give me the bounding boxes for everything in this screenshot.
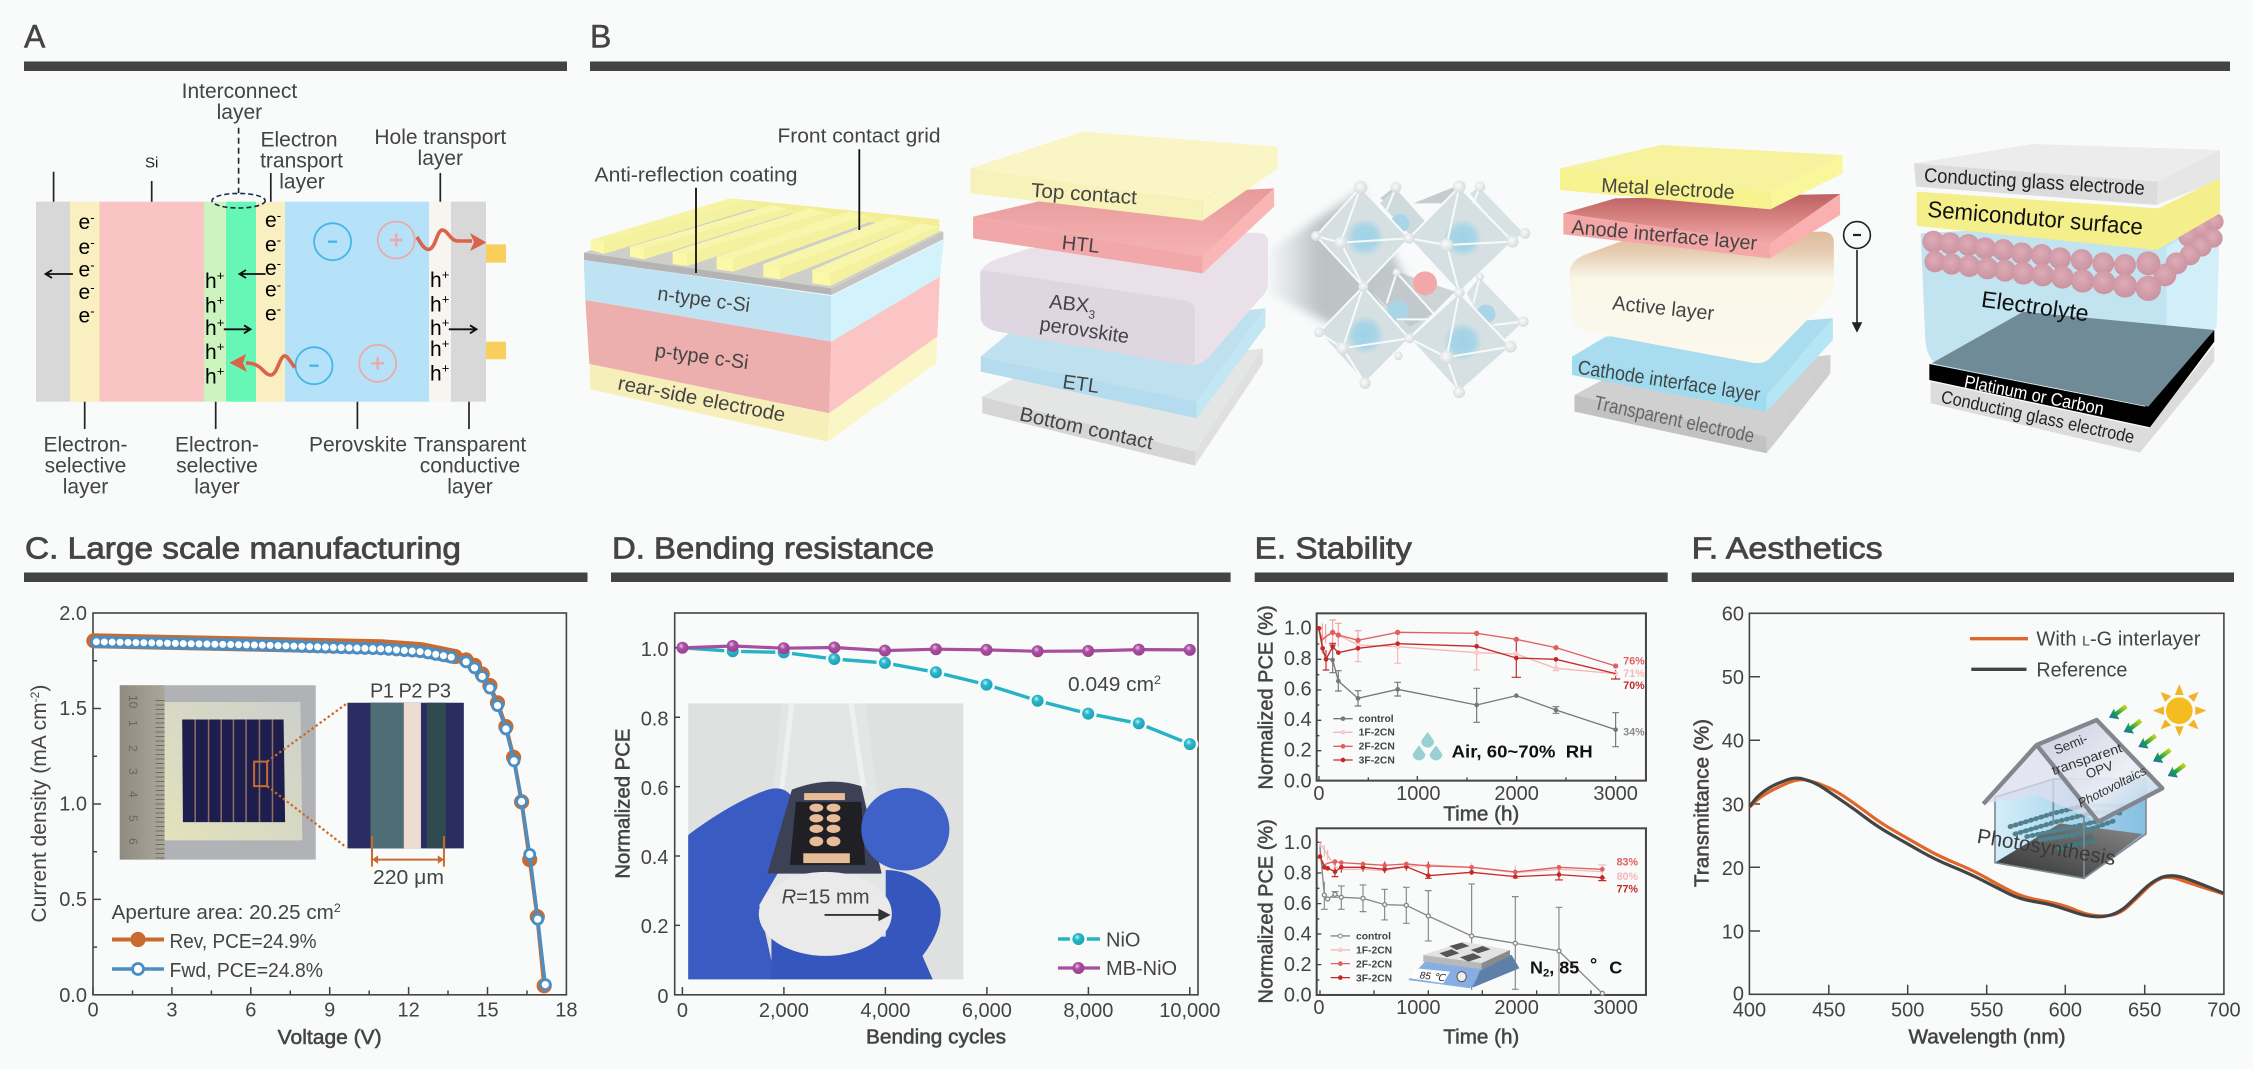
tick labels D: 4,000 (860, 1000, 910, 1022)
labels A: Electron- (43, 434, 128, 457)
tick labels F: 500 (1891, 1000, 1924, 1022)
lower stability chart: 0.8 (1284, 862, 1312, 884)
lower stability chart (1255, 819, 1646, 1048)
legend D: NiO (1106, 930, 1140, 952)
tick labels C: 0.5 (59, 889, 87, 911)
tick labels C: 15 (476, 1000, 499, 1022)
black arrows (46, 270, 476, 333)
labels: silicon and perovskite stacks: Anti-reflection coating (594, 165, 798, 187)
legend F: Reference (2036, 659, 2127, 681)
labels A: layer (63, 476, 108, 498)
MB-NiO series (676, 640, 1196, 657)
module photo: 10 (126, 695, 140, 709)
tick labels C: 0 (87, 1000, 99, 1022)
charge carriers: + (217, 268, 224, 283)
charge carriers: - (277, 208, 281, 223)
area annotation: 2 (1154, 673, 1161, 687)
labels A: Interconnect (182, 80, 297, 103)
interconnect callout (212, 128, 265, 208)
heading D: D. Bending resistance (612, 530, 934, 566)
leader lines (54, 172, 469, 429)
tick labels F: 400 (1733, 1000, 1766, 1022)
greenhouse labels: Photosynthesis (1975, 825, 2117, 870)
labels: silicon and perovskite stacks: ABX (1048, 291, 1090, 317)
lower stability chart: 3000 (1593, 997, 1638, 1019)
lower stability chart: 80% (1617, 871, 1638, 883)
charge carriers: + (442, 336, 449, 351)
lower stability chart: 85 ℃ (1419, 970, 1447, 985)
labels A: transport (260, 150, 343, 173)
lower stability chart: C (1609, 957, 1622, 977)
module photo (120, 685, 346, 860)
lower stability chart: 1F-2CN (1356, 946, 1392, 957)
y axis title D: Normalized PCE (611, 729, 634, 879)
charge carriers: e (265, 303, 277, 326)
charge carriers: h (430, 363, 442, 386)
crystal structure (1270, 180, 1530, 398)
upper stability chart: 2000 (1494, 783, 1539, 805)
labels: silicon and perovskite stacks: n-type c-Si (656, 283, 751, 317)
labels A: layer (279, 170, 325, 194)
labels A (43, 80, 526, 498)
heading bar A (24, 62, 567, 71)
lower stability chart: Normalized PCE (%) (1255, 819, 1277, 1003)
labels A: layer (418, 147, 463, 170)
labels A: Electron (260, 129, 338, 152)
charge carriers: + (217, 363, 224, 378)
upper stability chart: 76% (1623, 656, 1645, 668)
charge carriers: e (78, 305, 90, 328)
heading bar F (1692, 572, 2234, 582)
y axis title C: ) (28, 685, 51, 692)
panel E: stability (1255, 530, 1668, 1048)
labels: silicon and perovskite stacks: Front contact grid (778, 126, 940, 148)
labels: dye-sensitised stack: Conducting glass electrode (1939, 387, 2136, 447)
upper stability chart: 0.2 (1284, 740, 1312, 762)
x axis title F: Wavelength (nm) (1908, 1025, 2066, 1048)
labels: dye-sensitised stack: Semicondutor surface (1927, 196, 2144, 240)
upper stability chart: 1000 (1396, 783, 1441, 805)
tick labels C (59, 603, 578, 1022)
legend C: Rev, PCE=24.9% (170, 931, 317, 953)
charge carriers: + (217, 339, 224, 354)
upper stability chart: 34% (1623, 726, 1645, 738)
tick labels C: 18 (555, 1000, 578, 1022)
lower stability chart: 77% (1617, 883, 1638, 895)
icon: light arrows (2109, 704, 2186, 778)
legend F (1970, 629, 2201, 681)
charge carriers: - (90, 258, 95, 273)
tick labels C: 3 (166, 1000, 177, 1022)
upper stability chart: 3F-2CN (1359, 755, 1395, 766)
module photo: 4 (126, 791, 140, 798)
labels: silicon and perovskite stacks: HTL (1061, 232, 1101, 258)
layer stack (36, 202, 506, 402)
labels: dye-sensitised stack: Platinum or Carbon (1963, 371, 2106, 419)
charge carriers: + (217, 315, 224, 330)
charge carriers: + (442, 315, 449, 330)
charge carriers: - (90, 280, 95, 295)
charge carriers: h (205, 295, 217, 318)
charge carriers: e (265, 209, 277, 232)
charge carriers: e (265, 279, 277, 302)
module photo: 2 (126, 745, 140, 752)
charge carriers: - (277, 233, 281, 248)
upper stability chart: 0.6 (1284, 679, 1312, 701)
upper stability chart (1255, 605, 1646, 826)
NiO series (682, 643, 1198, 753)
photo labels (370, 680, 451, 889)
photo labels: P1 P2 P3 (370, 680, 451, 702)
tick labels D: 0.4 (641, 847, 668, 869)
upper stability chart: 3000 (1593, 783, 1638, 805)
heading E: E. Stability (1255, 530, 1412, 566)
labels A: Transparent (414, 434, 526, 457)
legend C: Fwd, PCE=24.8% (170, 960, 323, 982)
legend D (1058, 930, 1177, 980)
charge carriers: h (430, 294, 442, 317)
charge carriers: + (442, 267, 449, 282)
charge circles (296, 222, 415, 384)
icon: sun (2153, 684, 2207, 737)
tick labels F: 50 (1722, 667, 1744, 689)
upper stability chart: 71% (1623, 668, 1645, 680)
lower stability chart: 0.6 (1284, 893, 1312, 915)
tick labels D: 0.8 (641, 708, 668, 730)
tick labels D: 10,000 (1159, 1000, 1220, 1022)
lower stability chart: N (1530, 957, 1543, 977)
x axis title D: Bending cycles (866, 1026, 1006, 1048)
silicon cell block (584, 240, 944, 442)
tick labels C: 0.0 (59, 985, 87, 1007)
heading F: F. Aesthetics (1692, 530, 1883, 566)
lower stability chart: 2 (1543, 968, 1549, 980)
labels A: Electron- (175, 434, 259, 457)
legend F: With L-G interlayer (2036, 629, 2201, 651)
tick labels D: 8,000 (1063, 1000, 1113, 1022)
labels: organic stack (1571, 175, 1762, 448)
charge carriers: + (442, 361, 449, 376)
charge carriers: h (205, 317, 217, 340)
labels A: layer (217, 101, 262, 124)
wavy arrows (230, 230, 486, 375)
chart frame and ticks D (675, 613, 1198, 995)
lower stability chart: 0 (1313, 997, 1325, 1019)
lower stability chart: 3F-2CN (1356, 973, 1392, 984)
photo labels: 220 μm (373, 867, 444, 889)
upper stability chart: 1.0 (1284, 617, 1312, 639)
heading C: C. Large scale manufacturing (25, 530, 461, 566)
upper stability chart: 70% (1623, 680, 1645, 692)
charge carriers: e (78, 211, 90, 234)
panel C: large scale manufacturing (24, 530, 588, 1049)
tick labels F: 450 (1812, 1000, 1845, 1022)
y axis title C: -2 (28, 691, 42, 702)
module photo: 5 (126, 815, 140, 822)
module photo: 6 (126, 838, 140, 845)
tick labels C: 12 (397, 1000, 420, 1022)
lower stability chart: 2F-2CN (1356, 959, 1392, 970)
panel A: tandem cell schematic (24, 19, 567, 498)
labels A: selective (176, 455, 258, 478)
lower stability chart: ° (1590, 955, 1597, 975)
lower stability chart: control (1356, 932, 1391, 943)
y axis title F: Transmittance (%) (1690, 719, 1714, 887)
panel F: aesthetics (1690, 530, 2241, 1048)
charge carriers: - (90, 235, 95, 250)
greenhouse labels (1975, 731, 2149, 870)
tick labels D: 6,000 (962, 1000, 1012, 1022)
tick labels F: 20 (1722, 858, 1744, 880)
labels A: Perovskite (309, 434, 407, 457)
labels: silicon and perovskite stacks: perovskite (1038, 313, 1131, 348)
labels: silicon and perovskite stacks: Top contact (1030, 180, 1138, 209)
labels: organic stack: Transparent electrode (1592, 392, 1756, 448)
charge carriers: h (205, 270, 217, 293)
lower stability chart: 1000 (1396, 997, 1441, 1019)
tick labels F: 600 (2049, 1000, 2082, 1022)
tick labels C: 2.0 (59, 603, 87, 625)
labels: silicon and perovskite stacks: Bottom contact (1018, 403, 1155, 454)
tick labels D (641, 639, 1220, 1022)
tick labels C: 1.0 (59, 794, 87, 816)
upper stability chart: 2F-2CN (1359, 742, 1395, 753)
lower stability chart: 83% (1617, 857, 1638, 869)
upper stability chart: control (1359, 714, 1394, 725)
heading B: B (590, 19, 611, 55)
tick labels D: 0.2 (641, 916, 668, 938)
charge carriers: e (78, 281, 90, 304)
greenhouse labels: Semi- (2052, 731, 2090, 757)
charge carriers: h (205, 365, 217, 388)
panel B: device architectures (584, 19, 2230, 466)
charge carriers: e (78, 259, 90, 282)
tick labels F: 550 (1970, 1000, 2003, 1022)
tick labels F (1722, 604, 2241, 1022)
tick labels F: 60 (1722, 604, 1744, 626)
chart frame and ticks (93, 613, 566, 995)
upper stability chart: 0.0 (1284, 770, 1312, 792)
charge carriers: - (90, 210, 95, 225)
tick labels F: 700 (2207, 1000, 2241, 1022)
charge carriers: - (277, 256, 281, 271)
labels A: Hole transport (374, 126, 506, 149)
upper stability chart: Time (h) (1443, 804, 1519, 826)
tick labels C: 9 (324, 1000, 335, 1022)
heading A: A (24, 19, 46, 55)
charge carriers (78, 208, 449, 388)
tick labels D: 0.6 (641, 778, 668, 800)
lower stability chart: 1.0 (1284, 832, 1312, 854)
charge carriers: e (265, 234, 277, 257)
heading bar B (590, 62, 2230, 71)
upper stability chart: 0.4 (1284, 709, 1312, 731)
tick labels D: 2,000 (759, 1000, 809, 1022)
labels: silicon and perovskite stacks: rear-side electrode (616, 373, 787, 427)
labels A: selective (45, 455, 126, 478)
labels A: layer (447, 476, 493, 498)
organic cell stack (1560, 145, 1842, 453)
labels: dye-sensitised stack: Electrolyte (1980, 286, 2090, 326)
tick labels D: 0 (677, 1000, 688, 1022)
microscope image (347, 703, 464, 867)
labels A: layer (194, 476, 240, 498)
module photo: 3 (126, 768, 140, 775)
tick labels F: 0 (1733, 984, 1744, 1006)
labels A: conductive (420, 455, 520, 478)
panel D: bending resistance (611, 530, 1231, 1048)
greenhouse labels: OPV (2084, 758, 2115, 782)
upper stability chart: 0.8 (1284, 648, 1312, 670)
tick labels D: 0 (657, 986, 668, 1008)
icon: greenhouse (1983, 720, 2162, 878)
labels: organic stack: Metal electrode (1601, 175, 1735, 204)
lower stability chart: , 85 (1549, 957, 1579, 977)
charge carriers: + (442, 292, 449, 307)
chart frame and ticks F (1749, 613, 2224, 994)
tick labels F: 10 (1722, 921, 1744, 943)
tick labels F: 30 (1722, 794, 1744, 816)
labels: organic stack: Anode interface layer (1571, 217, 1758, 255)
tick labels C: 1.5 (59, 698, 87, 720)
labels: organic stack: Cathode interface layer (1576, 357, 1762, 406)
charge carriers: + (217, 293, 224, 308)
heading bar E (1255, 572, 1668, 582)
lower stability chart: 0.0 (1284, 985, 1312, 1007)
charge carriers: h (205, 341, 217, 364)
lower stability chart: 0.2 (1284, 954, 1312, 976)
upper stability chart: 0 (1313, 783, 1325, 805)
perovskite stack (971, 132, 1278, 466)
photo: bent device (688, 703, 963, 979)
labels: organic stack: Active layer (1611, 292, 1715, 325)
labels A: Si (145, 154, 158, 172)
lower stability chart: 2000 (1494, 997, 1539, 1019)
charge carriers: - (277, 278, 281, 293)
legend C: Aperture area: 20.25 cm (112, 902, 327, 924)
labels: silicon and perovskite stacks: ETL (1061, 371, 1101, 398)
tick labels F: 40 (1722, 731, 1744, 753)
legend C: 2 (334, 901, 341, 915)
charge carriers: - (277, 302, 281, 317)
labels: silicon and perovskite stacks: p-type c-Si (654, 340, 750, 374)
upper stability chart: 1F-2CN (1359, 728, 1395, 739)
labels: silicon and perovskite stacks (594, 126, 1155, 454)
tick labels F: 650 (2128, 1000, 2161, 1022)
charge carriers: - (90, 304, 95, 319)
radius label: R=15 mm (782, 886, 870, 908)
module photo: 1 (126, 720, 140, 727)
contact grid (584, 198, 943, 295)
lower stability chart: 0.4 (1284, 924, 1312, 946)
charge carriers: h (430, 269, 442, 292)
tick labels D: 1.0 (641, 639, 668, 661)
legend D: MB-NiO (1106, 958, 1177, 980)
electron arrow (1844, 222, 1870, 331)
J-V curves (94, 641, 552, 993)
charge carriers: e (265, 257, 277, 280)
transmittance curves (1749, 778, 2224, 917)
greenhouse labels: Photovoltaics (2076, 764, 2149, 810)
legend C (112, 901, 341, 982)
dye-sensitised stack (1914, 144, 2224, 453)
charge carriers: e (78, 236, 90, 259)
heading bar D (611, 572, 1231, 582)
labels: silicon and perovskite stacks: 3 (1088, 307, 1096, 322)
lower stability chart: Time (h) (1443, 1026, 1519, 1048)
heading bar C (24, 572, 588, 582)
charge carriers: h (430, 338, 442, 361)
upper stability chart: Normalized PCE (%) (1255, 605, 1277, 789)
labels: dye-sensitised stack: Conducting glass electrode (1923, 165, 2145, 200)
upper stability chart: Air, 60~70% RH (1452, 741, 1593, 761)
area annotation: 0.049 cm (1068, 674, 1150, 696)
charge carriers: h (430, 317, 442, 340)
tick labels C: 6 (245, 1000, 256, 1022)
greenhouse labels: transparent (2050, 740, 2124, 778)
labels: dye-sensitised stack (1923, 165, 2145, 447)
y axis title C: Current density (mA cm (28, 703, 51, 923)
x axis title C: Voltage (V) (278, 1026, 382, 1049)
